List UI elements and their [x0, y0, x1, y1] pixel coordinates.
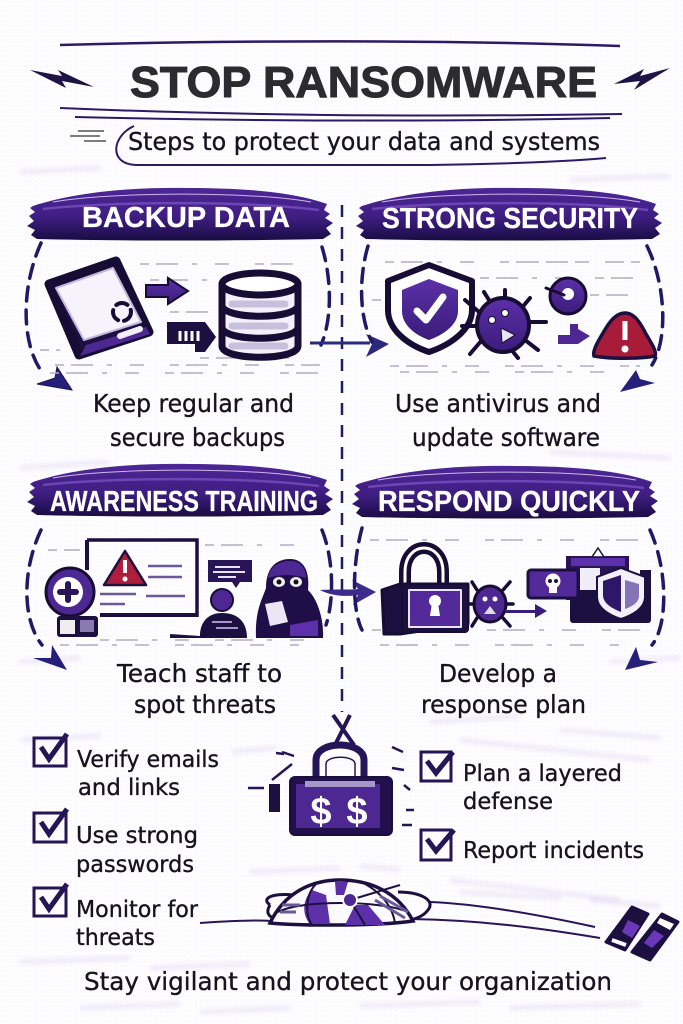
- panel: strong security: [356, 188, 663, 452]
- checkbox: report incidents: [421, 830, 644, 864]
- arrow: training to response: [320, 580, 376, 605]
- panel: awareness training: [27, 464, 333, 719]
- icon: hacker: [256, 559, 323, 638]
- checkbox: strong passwords: passwords: [76, 852, 194, 878]
- icon: files, skull and shield: [528, 548, 651, 623]
- top rule: [60, 41, 620, 46]
- icon: arrow to folder: [505, 604, 547, 618]
- icon: small arrow: [558, 324, 590, 344]
- title: STOP RANSOMWARE: [130, 58, 597, 107]
- arrowhead: [37, 367, 72, 390]
- description: Teach staff to: [116, 659, 282, 688]
- checkbox: layered defense: [421, 752, 622, 815]
- sketch marks: [48, 545, 320, 645]
- checkbox: strong passwords: Use strong: [76, 823, 198, 849]
- subtitle: Steps to protect your data and systems: [128, 127, 600, 156]
- checkbox: verify emails: and links: [78, 775, 180, 801]
- icon: arrow to database: [146, 278, 188, 304]
- icon: ransom lock with dollars: $: [346, 791, 368, 833]
- icon: monitor: [87, 540, 197, 617]
- dashed arcs: [354, 528, 362, 630]
- icon: plus disc: [46, 568, 94, 616]
- icon: left lightning bolt: [30, 70, 94, 88]
- banner: STRONG SECURITY: [382, 203, 638, 235]
- description: Develop a: [439, 659, 557, 688]
- banner: [27, 188, 333, 240]
- icon: database: [222, 273, 298, 357]
- dashed arcs: [362, 246, 372, 342]
- bottom rules: [60, 108, 622, 121]
- closing message: Stay vigilant and protect your organization: [84, 967, 612, 996]
- icon: hard drive: [49, 261, 150, 356]
- icon: right lightning bolt: [614, 68, 670, 90]
- checkbox: layered defense: Plan a layered: [463, 761, 622, 787]
- description: [93, 389, 294, 452]
- arrow: backup to security: [310, 334, 389, 357]
- checkbox: verify emails: [34, 734, 219, 801]
- title block: [60, 41, 622, 121]
- arrowhead: [625, 647, 658, 670]
- icon: red warning: [594, 313, 655, 358]
- sketch marks: [370, 540, 640, 645]
- banner: [356, 188, 662, 240]
- checkbox: monitor threats: [34, 884, 199, 951]
- description: update software: [412, 423, 600, 452]
- banner: BACKUP DATA: [82, 202, 290, 234]
- description: Use antivirus and: [395, 389, 601, 418]
- icon: tag arrow: [167, 322, 216, 352]
- panel: backup data: [26, 188, 333, 452]
- icon: shield with check: [388, 265, 472, 352]
- icon: speech bubble: [208, 560, 252, 588]
- description: Keep regular and: [93, 389, 294, 418]
- checkbox: monitor threats: threats: [76, 925, 155, 951]
- description: secure backups: [110, 423, 285, 452]
- icon: usb drives: [606, 907, 678, 960]
- dashed arc left: [26, 243, 42, 372]
- icon: shield: [597, 568, 645, 619]
- checkbox: report incidents: Report incidents: [463, 838, 644, 864]
- checkbox: monitor threats: Monitor for: [76, 897, 199, 923]
- dashed arcs: [27, 530, 42, 645]
- banner: [352, 466, 658, 518]
- sketch marks: [372, 262, 640, 372]
- icon: small device: [57, 616, 98, 637]
- icon: virus: [462, 290, 546, 358]
- description: spot threats: [134, 690, 276, 719]
- icon: globe on horizon: [200, 880, 600, 938]
- arrowhead: [620, 370, 655, 392]
- arrowhead: [33, 645, 67, 670]
- checkbox: layered defense: defense: [463, 789, 553, 815]
- central dashed divider: [341, 205, 343, 712]
- description: response plan: [421, 690, 586, 719]
- banner: RESPOND QUICKLY: [378, 486, 640, 518]
- dashed arc right: [321, 247, 329, 345]
- icon: ransom lock with dollars: $: [310, 791, 332, 833]
- icon: ransom lock with dollars: [248, 715, 414, 835]
- checkbox: strong passwords: [34, 809, 198, 878]
- description: [421, 659, 586, 719]
- icon: red warning triangle: [104, 551, 146, 585]
- banner: AWARENESS TRAINING: [50, 486, 318, 518]
- checkbox: verify emails: Verify emails: [77, 747, 219, 773]
- panel: respond quickly: [352, 466, 664, 719]
- description: [116, 659, 282, 719]
- checklist: left: [34, 734, 219, 951]
- icon: target disc: [546, 278, 586, 314]
- icon: small virus: [468, 582, 513, 626]
- icon: skull box: [528, 570, 578, 598]
- description: [395, 389, 601, 452]
- sketch marks: [40, 264, 325, 373]
- icon: person: [170, 589, 247, 638]
- checklist: right: [421, 752, 644, 864]
- banner: [27, 464, 333, 518]
- icon: padlock: [382, 548, 468, 634]
- subtitle: [70, 126, 606, 165]
